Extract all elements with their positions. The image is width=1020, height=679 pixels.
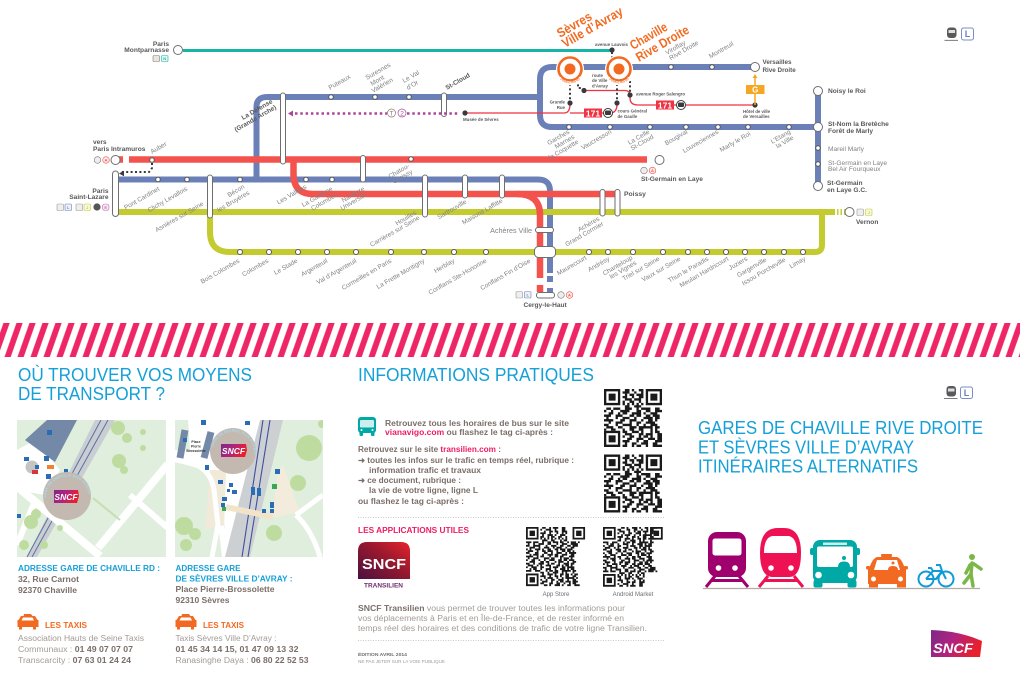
station labels lower: Colombes (310, 191, 340, 212)
heading: ET SÈVRES VILLE D’AVRAY (698, 436, 914, 458)
bus stop names: Rue (557, 105, 566, 110)
bus stop names: avenue Roger Salengro (636, 92, 685, 96)
bus 171 red routes (465, 90, 755, 113)
icon: tram pink (759, 528, 803, 587)
map Chaville: SNCF (54, 492, 78, 502)
icon: train purple (706, 532, 748, 587)
edition note: NE PAS JETER SUR LA VOIE PUBLIQUE (358, 659, 445, 664)
station labels upper (150, 39, 735, 156)
bus stop names: route (592, 73, 604, 78)
RER A red (116, 160, 647, 292)
right branch stations: Bel Air Fourqueux (828, 166, 881, 173)
app description: vos déplacements à Paris et en Île-de-France, et de rester informé en (358, 614, 624, 623)
transilien text: Retrouvez sur le site transilien.com : (358, 445, 501, 454)
heading (698, 417, 983, 476)
heading: GARES DE CHAVILLE RIVE DROITE (698, 417, 983, 438)
bus 171 badges (584, 100, 686, 118)
right branch stations: St-Germain en Laye (828, 160, 887, 167)
connection badges: J (86, 205, 88, 210)
connection badges (57, 56, 872, 298)
station labels lower: Issou Porcheville (741, 256, 787, 287)
transilien text (358, 445, 574, 506)
line N teal (183, 49, 612, 52)
transilien text: la vie de votre ligne, ligne L (369, 486, 478, 495)
bus text: Retrouvez tous les horaires de bus sur le site (385, 419, 570, 428)
map Chaville: GARE DE CHAVILLE RIVE DROITE (44, 474, 91, 498)
station labels lower: L’Etang (770, 128, 792, 146)
panel: informations pratiques (358, 364, 664, 664)
dotted tram T2 purple (288, 109, 460, 118)
heading: OÙ TROUVER VOS MOYENS (18, 364, 252, 385)
station labels lower: Marly le Roi (719, 131, 752, 154)
address Chaville (18, 564, 160, 595)
heading: INFORMATIONS PRATIQUES (358, 364, 594, 385)
QR code transilien (604, 454, 662, 512)
applications heading: LES APPLICATIONS UTILES (358, 526, 470, 535)
heading: DE TRANSPORT ? (18, 383, 165, 404)
terminus names: Vernon (856, 219, 878, 226)
map Sèvres: Pierre (191, 444, 201, 448)
bus text: vianavigo.com ou flashez le tag ci-après : (385, 428, 553, 437)
station labels lower: Bécon (227, 183, 246, 199)
station labels lower: Louveciennes (682, 128, 721, 155)
orange station names (554, 3, 692, 65)
bus stop names: de Versailles (743, 114, 770, 119)
app icon SNCF Transilien (358, 542, 410, 590)
bus stop names: de Gaulle (618, 114, 638, 119)
app description (358, 604, 647, 633)
station labels lower: Andrésy (587, 255, 612, 274)
bus 171 badges: 171 (658, 100, 672, 110)
station labels lower: Conflans Fin d’Oise (479, 257, 532, 292)
station labels upper: Le Val (402, 69, 421, 85)
bus 171 badges: 171 (586, 108, 600, 118)
station labels lower: Les Vallées (276, 183, 309, 206)
line diagram (56, 3, 889, 309)
station labels lower: Triel sur Seine (621, 255, 661, 283)
connection badges: A (568, 292, 571, 298)
taxis Chaville: Communaux : 01 49 07 07 07 (18, 645, 134, 654)
station labels lower: Argenteuil (300, 257, 329, 278)
station labels lower: Asnières sur Seine (154, 200, 205, 234)
bus G badge and arrow: G (752, 86, 758, 95)
station labels lower: Carrières sur Seine (369, 214, 421, 249)
map Sèvres: SNCF (222, 446, 246, 456)
station dots (150, 65, 820, 254)
station labels lower: Nanterre (341, 185, 366, 204)
transport icons (703, 528, 981, 588)
station labels lower: La Garenne (301, 185, 334, 209)
connection badges: E (104, 205, 107, 210)
station marker Sèvres Ville d'Avray (556, 56, 584, 86)
icon: pedestrian (964, 554, 981, 586)
bus stop names: de Ville (592, 78, 608, 83)
terminus names: Poissy (624, 191, 646, 198)
heading (18, 364, 252, 404)
address Chaville: 32, Rue Carnot (18, 575, 79, 584)
terminus names: St-Germain (827, 180, 863, 187)
connection badges: J (868, 210, 870, 215)
bus stop names: d’Avray (592, 84, 609, 88)
QR code App Store (526, 527, 585, 586)
address Chaville: ADRESSE GARE DE CHAVILLE RD : (18, 564, 160, 573)
station labels lower: Vaux sur Seine (641, 255, 682, 284)
map Sèvres: Place (191, 440, 201, 444)
station labels upper: Suresnes (364, 61, 393, 82)
line J yellow (118, 212, 846, 252)
station marker Chaville Rive Droite (605, 56, 633, 86)
station labels lower: Marnes (554, 133, 577, 151)
terminus names: Forêt de Marly (828, 128, 873, 135)
station labels upper: Viroflay (665, 39, 688, 57)
taxis Chaville: Association Hauts de Seine Taxis (18, 634, 144, 643)
station labels lower: La Frette Montigny (376, 257, 427, 291)
station labels lower: Chanteloup (602, 254, 634, 277)
station labels upper: d’Or (406, 79, 420, 92)
heading: ITINÉRAIRES ALTERNATIFS (698, 456, 918, 476)
dotted tram T2 purple: 2 (400, 110, 404, 118)
terminus names: Noisy le Roi (828, 88, 866, 95)
station labels lower: Achères (577, 215, 602, 234)
right branch stations: Mareil Marly (828, 146, 865, 153)
terminus names: vers (93, 139, 107, 146)
terminus names (69, 41, 889, 309)
bus stop names: avenue Lauvois (595, 42, 629, 47)
icon: bus teal (810, 540, 860, 588)
terminus names: Paris (92, 188, 109, 195)
bus stop names: Grande (550, 100, 566, 104)
taxis Sèvres: Taxis Sèvres Ville D’Avray : (176, 634, 276, 643)
station labels lower: Clichy Levallois (147, 185, 190, 214)
station labels upper: Mont (370, 74, 386, 88)
app description: SNCF Transilien vous permet de trouver toutes les informations pour (358, 604, 625, 613)
station labels lower: Gargenville (736, 256, 768, 279)
transilien text: ou flashez le tag ci-après : (358, 497, 464, 506)
station labels lower: La Celle (627, 128, 651, 147)
interchange pills (112, 93, 620, 298)
transilien text: ➜ toutes les infos sur le trafic en temps réel, rubrique : (358, 456, 574, 465)
station labels upper: Valérien (370, 77, 395, 95)
terminus names: Paris (153, 41, 169, 48)
station labels lower (123, 128, 808, 297)
connection badges: N (163, 56, 166, 61)
station labels lower: Herblay (433, 257, 457, 275)
striped band (0, 323, 1020, 357)
map Sèvres: GARE DE SÈVRES VILLE D’AVRAY (210, 429, 256, 456)
icon: taxi (18, 614, 38, 630)
station labels lower: St-Cloud (630, 133, 655, 152)
station labels upper: Auber (150, 140, 169, 156)
bus G badge and arrow (746, 74, 764, 105)
terminus names: en Laye G.C. (827, 187, 867, 194)
right branch stations: Achères Ville (490, 226, 532, 235)
station labels lower: Maisons Laffitte (461, 197, 504, 226)
line L badge: L (964, 388, 970, 398)
taxis Sèvres: LES TAXIS (203, 621, 245, 630)
transilien text: ➜ ce document, rubrique : (358, 476, 461, 485)
terminus names: Rive Droite (762, 67, 796, 74)
app description: temps réel des horaires et des conditions de trafic de votre ligne Transilien. (358, 624, 647, 633)
arrow to Saint-Lazare (119, 171, 124, 176)
map Sèvres: Brossolette (186, 449, 206, 453)
connection badges: A (651, 168, 654, 173)
station labels lower: Grand Cormier (564, 220, 606, 248)
taxis Chaville: Transcarcity : 07 63 01 24 24 (18, 656, 132, 665)
station labels lower: Limay (788, 255, 808, 270)
station labels lower: Meulan Hardricourt (679, 256, 730, 289)
SNCF logo (931, 630, 982, 657)
terminus names: St-Nom la Bretêche (828, 121, 889, 128)
station labels upper: Montreuil (708, 40, 735, 60)
bus stop names: Hôtel de ville (743, 109, 771, 114)
address Sèvres: 92310 Sèvres (176, 596, 230, 605)
terminus names: Montparnasse (124, 47, 169, 54)
app icon SNCF Transilien: TRANSILIEN (364, 582, 403, 590)
station labels lower: Houilles (394, 209, 419, 227)
station labels lower: Croissy (392, 168, 415, 186)
address Chaville: 92370 Chaville (18, 586, 78, 595)
station marker Sèvres Ville d'Avray: VOUS ÊTES ICI (560, 78, 580, 84)
station labels lower: Thun le Paradis (667, 255, 711, 284)
station labels lower: Pont Cardinet (123, 186, 161, 212)
map Chaville (17, 420, 166, 557)
station labels lower: Colombes (241, 257, 271, 278)
station labels lower: Conflans Ste-Honorine (428, 257, 488, 297)
bus stop names (463, 42, 771, 122)
line L blue (118, 67, 818, 295)
taxis Chaville: LES TAXIS (45, 621, 88, 630)
orange station names: Chaville (627, 19, 670, 53)
panel: où trouver (17, 364, 323, 665)
taxis Chaville (18, 621, 144, 665)
address Sèvres: ADRESSE GARE (176, 564, 241, 573)
station labels lower: Cormeilles en Paris (341, 257, 394, 292)
address Sèvres: DE SÈVRES VILLE D’AVRAY : (176, 574, 292, 584)
icon: taxi (176, 614, 196, 630)
line L badge (944, 386, 972, 398)
QR captions: App Store (543, 592, 570, 598)
terminus names: (Grande Arche) (234, 104, 278, 134)
line L badge top (944, 28, 974, 40)
terminus names: St-Germain en Laye (641, 176, 703, 183)
connection badges: L (67, 205, 70, 210)
QR code Android Market (603, 527, 663, 587)
terminus names: Saint-Lazare (69, 194, 109, 201)
terminus names: Versailles (762, 59, 792, 66)
walking links dotted (121, 52, 630, 172)
station labels lower: Université (339, 191, 368, 212)
bus stops (462, 47, 758, 116)
station labels lower: les Vignes (609, 259, 639, 281)
panel: gares title (698, 386, 983, 657)
taxis Sèvres: Ranasinghe Daya : 06 80 22 52 53 (176, 656, 309, 665)
map Sèvres (175, 420, 323, 557)
station labels lower: Bougival (664, 128, 689, 147)
station labels lower: Bois Colombes (200, 257, 242, 286)
station labels lower: Le Stade (273, 257, 299, 277)
taxis Sèvres: 01 45 34 14 15, 01 47 09 13 32 (176, 645, 299, 654)
station labels lower: la Ville (775, 134, 795, 150)
station labels lower: la Coquette (548, 138, 580, 161)
station labels lower: Val d’Argenteuil (315, 257, 358, 286)
orange station names: Ville d’Avray (559, 3, 626, 51)
station labels lower: Maurecourt (556, 255, 588, 277)
bus stop names: Musée de Sèvres (463, 117, 499, 122)
edition note (358, 650, 445, 664)
connection badges: A (105, 158, 108, 162)
terminus names: La Défense (240, 98, 274, 122)
station labels upper: Rive Droite (668, 40, 700, 62)
dotted tram T2 purple: T (390, 110, 394, 118)
station labels lower: Juziers (728, 255, 750, 272)
line L badge top: L (965, 29, 971, 39)
taxis Sèvres (176, 621, 309, 665)
orange station names: Rive Droite (633, 22, 692, 65)
SNCF logo: SNCF (933, 640, 973, 656)
right branch stations (490, 146, 887, 235)
connection badges: L (526, 292, 529, 298)
icon: bicycle (918, 565, 954, 586)
terminus names: Cergy-le-Haut (524, 302, 568, 309)
address Sèvres (176, 564, 292, 605)
icon: bus (358, 417, 376, 436)
station labels lower: Chatou- (387, 163, 411, 180)
edition note: ÉDITION AVRIL 2014 (358, 650, 408, 657)
bus stop names: cours Général (618, 108, 647, 114)
orange station names: Sèvres (554, 9, 594, 41)
terminus names: St-Cloud (444, 72, 471, 92)
station labels lower: Sartrouville (436, 198, 468, 221)
address Sèvres: Place Pierre-Brossolette (176, 585, 275, 594)
station labels upper: Puteaux (328, 73, 353, 92)
QR code bus (604, 389, 662, 447)
station labels lower: Garches (546, 128, 572, 147)
station labels lower: Vaucresson (580, 128, 613, 152)
terminus names: Paris Intramuros (93, 146, 146, 153)
QR captions (543, 592, 654, 598)
bus text (385, 419, 570, 437)
transilien text: information trafic et travaux (369, 466, 482, 475)
station marker Chaville Rive Droite: VOUS ÊTES ICI (610, 78, 629, 84)
app icon SNCF Transilien: SNCF (362, 557, 406, 573)
terminus circles (111, 46, 854, 216)
icon: taxi orange (866, 554, 908, 588)
station labels lower: les Bruyères (216, 189, 252, 214)
QR captions: Android Market (613, 592, 654, 598)
